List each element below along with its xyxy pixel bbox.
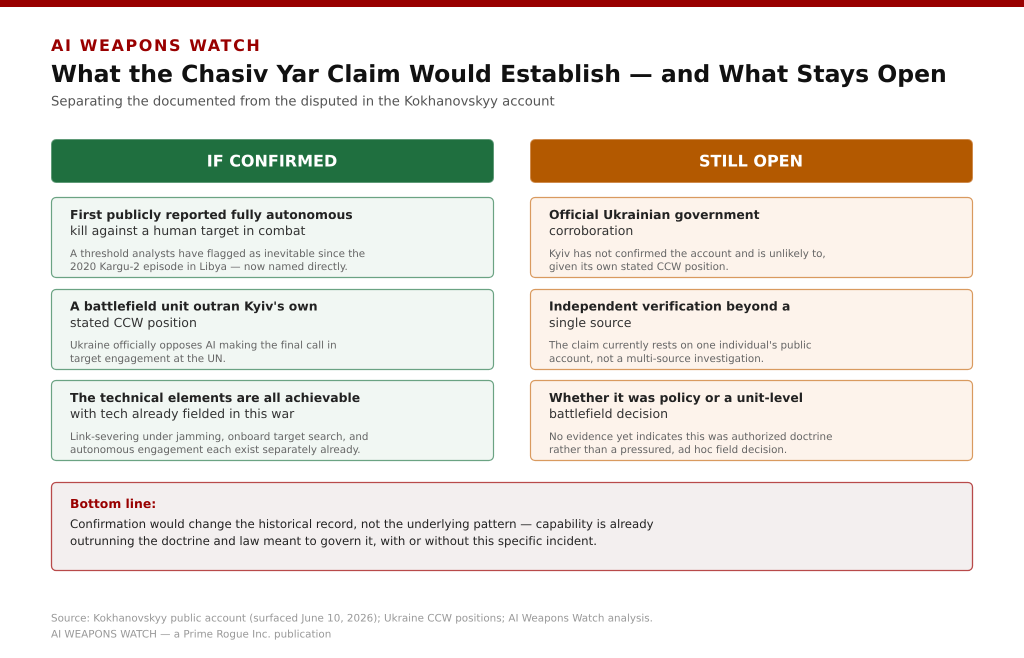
- callout: bottom line: Confirmation would change the historical record, not the underlying pattern — capability is already: [70, 517, 654, 531]
- column header: if confirmed: IF CONFIRMED: [207, 152, 337, 170]
- card: official corroboration: corroboration: [549, 223, 633, 238]
- card: official corroboration: given its own stated CCW position.: [549, 261, 729, 273]
- source footer: Source: Kokhanovskyy public account (surfaced June 10, 2026); Ukraine CCW positions; AI Weapons Watch analysis.: [51, 612, 653, 624]
- callout: bottom line: [52, 482, 972, 570]
- card: technical elements: Link-severing under jamming, onboard target search, and: [70, 431, 368, 443]
- card: outran Kyiv's position: Ukraine officially opposes AI making the final call in: [70, 340, 337, 352]
- card: official corroboration: Kyiv has not confirmed the account and is unlikely to,: [549, 248, 826, 260]
- subtitle: Separating the documented from the disputed in the Kokhanovskyy account: [51, 94, 555, 110]
- card: first publicly reported: kill against a human target in combat: [70, 223, 306, 238]
- column header: still open: [530, 140, 972, 182]
- card: technical elements: autonomous engagement each exist separately already.: [70, 444, 361, 456]
- card: first publicly reported: A threshold analysts have flagged as inevitable since the: [70, 248, 365, 260]
- column header: if confirmed: [52, 140, 494, 182]
- callout: bottom line: outrunning the doctrine and law meant to govern it, with or without this specific incident.: [70, 534, 597, 548]
- card: outran Kyiv's position: [52, 290, 494, 370]
- callout: bottom line: Bottom line:: [70, 496, 156, 511]
- source footer: AI WEAPONS WATCH — a Prime Rogue Inc. publication: [51, 628, 331, 640]
- card: independent verification: Independent verification beyond a: [549, 298, 790, 314]
- card: independent verification: [530, 290, 972, 370]
- card: technical elements: The technical elements are all achievable: [70, 390, 360, 405]
- column header: still open: STILL OPEN: [699, 152, 803, 170]
- card: outran Kyiv's position: A battlefield unit outran Kyiv's own: [70, 298, 318, 314]
- card: first publicly reported: 2020 Kargu-2 episode in Libya — now named directly.: [70, 261, 348, 273]
- card: first publicly reported: [52, 198, 494, 278]
- card: policy or unit-level: [530, 380, 972, 460]
- card: policy or unit-level: rather than a pressured, ad hoc field decision.: [549, 444, 787, 456]
- card: policy or unit-level: battlefield decision: [549, 406, 668, 421]
- card: outran Kyiv's position: target engagement at the UN.: [70, 353, 226, 365]
- card: policy or unit-level: No evidence yet indicates this was authorized doctrine: [549, 431, 832, 443]
- card: policy or unit-level: Whether it was policy or a unit-level: [549, 390, 803, 405]
- card: technical elements: with tech already fielded in this war: [70, 406, 295, 421]
- title: What the Chasiv Yar Claim Would Establish — and What Stays Open: [51, 60, 947, 88]
- card: independent verification: single source: [549, 315, 632, 330]
- source footer: [51, 612, 653, 640]
- card: independent verification: account, not a multi-source investigation.: [549, 353, 764, 365]
- card: official corroboration: [530, 198, 972, 278]
- top accent bar: [0, 0, 1024, 7]
- card: independent verification: The claim currently rests on one individual's public: [548, 340, 812, 352]
- card: technical elements: [52, 380, 494, 460]
- card: first publicly reported: First publicly reported fully autonomous: [70, 207, 353, 222]
- card: outran Kyiv's position: stated CCW position: [70, 315, 197, 330]
- card: official corroboration: Official Ukrainian government: [549, 207, 760, 222]
- eyebrow label: AI WEAPONS WATCH: [51, 36, 261, 55]
